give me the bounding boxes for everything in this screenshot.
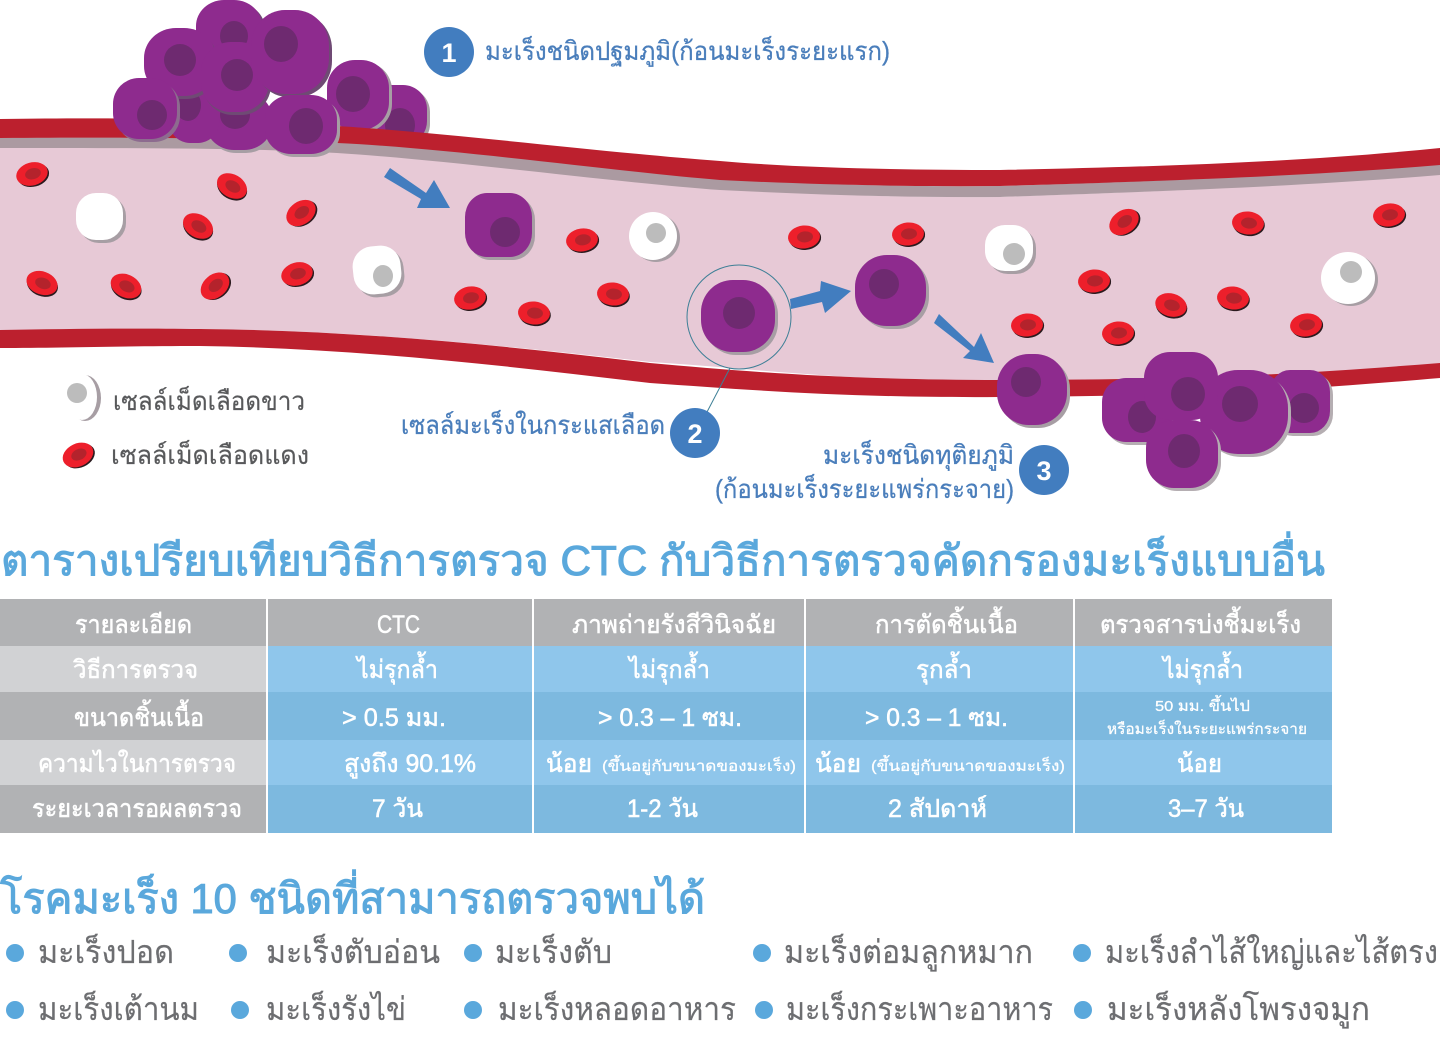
table header row: ภาพถ่ายรังสีวินิจฉัย (572, 611, 776, 639)
marker 1: 1 (441, 38, 457, 68)
table row: sensitivity: น้อย (815, 750, 861, 778)
list row 2: มะเร็งเต้านม (38, 990, 199, 1027)
cancer type list (6, 933, 1438, 1029)
table row: waiting time: 2 สัปดาห์ (888, 795, 987, 823)
table row: method: ไม่รุกล้ำ (355, 651, 438, 685)
label: circulating tumour cell: เซลล์มะเร็งในกระแสเลือด (401, 409, 665, 440)
list row 1: มะเร็งปอด (38, 933, 174, 970)
table row: sensitivity (38, 749, 1222, 779)
table header row (75, 606, 1301, 639)
label: secondary tumour: (ก้อนมะเร็งระยะแพร่กระจาย) (715, 473, 1014, 504)
marker 2 (670, 408, 720, 458)
marker 3: 3 (1036, 456, 1052, 486)
table row: waiting time: 1-2 วัน (627, 795, 698, 823)
heading: comparison table: ตารางเปรียบเทียบวิธีการตรวจ CTC กับวิธีการตรวจคัดกรองมะเร็งแบบอื่น (1, 532, 1325, 584)
table row: waiting time (32, 795, 1244, 823)
label: secondary tumour (715, 439, 1014, 504)
table row: tumour size: หรือมะเร็งในระยะแพร่กระจาย (1107, 719, 1307, 738)
legend: red blood cell: เซลล์เม็ดเลือดแดง (111, 439, 309, 470)
list row 2 (38, 990, 1370, 1029)
vessel wall shadow (0, 135, 1440, 197)
primary tumour rear cells behind the vessel wall (327, 60, 430, 148)
list row 2: มะเร็งหลังโพรงจมูก (1107, 990, 1370, 1029)
list row 1: มะเร็งตับอ่อน (266, 933, 440, 970)
legend: white blood cell (67, 374, 305, 421)
table row: sensitivity: น้อย (546, 750, 592, 778)
table header row: รายละเอียด (75, 611, 192, 639)
callout ring around cell (687, 265, 791, 412)
table row: sensitivity: (ขึ้นอยู่กับขนาดของมะเร็ง) (871, 755, 1065, 775)
table header row: ตรวจสารบ่งชี้มะเร็ง (1100, 606, 1301, 639)
table row: sensitivity: (ขึ้นอยู่กับขนาดของมะเร็ง) (602, 755, 796, 775)
vessel wall top (0, 118, 1440, 186)
table row: tumour size: > 0.3 – 1 ซม. (598, 704, 742, 732)
table row: tumour size: > 0.5 มม. (342, 704, 446, 732)
marker 2: 2 (687, 419, 703, 449)
marker 3 (1019, 445, 1069, 495)
list row 1 (38, 933, 1438, 972)
table row: waiting time: 3–7 วัน (1168, 795, 1244, 823)
label: primary tumour: มะเร็งชนิดปฐมภูมิ(ก้อนมะเร็งระยะแรก) (485, 35, 890, 67)
table row: tumour size: > 0.3 – 1 ซม. (865, 704, 1008, 732)
table header row: CTC (377, 611, 420, 639)
primary tumour cluster (113, 0, 340, 157)
red blood cells (14, 158, 1408, 347)
label: secondary tumour: มะเร็งชนิดทุติยภูมิ (823, 439, 1014, 471)
white blood cells (76, 193, 1378, 306)
legend: white blood cell: เซลล์เม็ดเลือดขาว (113, 385, 305, 416)
list row 1: มะเร็งต่อมลูกหมาก (784, 933, 1033, 972)
table row: method: ไม่รุกล้ำ (627, 651, 710, 685)
table row: waiting time: ระยะเวลารอผลตรวจ (32, 795, 242, 823)
bullets (6, 944, 1092, 1019)
list row 2: มะเร็งกระเพาะอาหาร (786, 990, 1053, 1027)
table row: method: ไม่รุกล้ำ (1161, 651, 1243, 685)
table row: method (73, 651, 1243, 685)
blood vessel interior (0, 146, 1440, 381)
table header row: การตัดชิ้นเนื้อ (875, 606, 1018, 639)
secondary tumour cluster (997, 352, 1333, 491)
list row 2: มะเร็งรังไข่ (266, 990, 406, 1027)
arrow: cell moving along vessel (790, 281, 851, 313)
table row: sensitivity: น้อย (1177, 750, 1222, 778)
table row: method: วิธีการตรวจ (73, 656, 198, 684)
legend: red blood cell (59, 437, 309, 474)
table row: waiting time: 7 วัน (372, 795, 423, 823)
heading: detectable cancers: โรคมะเร็ง 10 ชนิดที่สามารถตรวจพบได้ (0, 870, 705, 922)
table row: sensitivity: สูงถึง 90.1% (344, 750, 476, 779)
list row 1: มะเร็งตับ (495, 933, 612, 970)
table row: tumour size (74, 695, 1307, 738)
table row: tumour size: 50 มม. ขึ้นไป (1155, 695, 1250, 715)
table row: tumour size: ขนาดชิ้นเนื้อ (74, 699, 204, 732)
marker 1 (424, 27, 474, 77)
arrow: primary to bloodstream (384, 168, 450, 208)
comparison table (0, 599, 1332, 833)
table row: method: รุกล้ำ (916, 651, 972, 685)
arrow: cell to secondary site (934, 314, 994, 363)
table row: sensitivity: ความไวในการตรวจ (38, 749, 236, 778)
table backgrounds (0, 599, 1332, 833)
list row 2: มะเร็งหลอดอาหาร (498, 990, 736, 1027)
vessel wall bottom (0, 329, 1440, 397)
circulating tumour cells (465, 193, 929, 355)
